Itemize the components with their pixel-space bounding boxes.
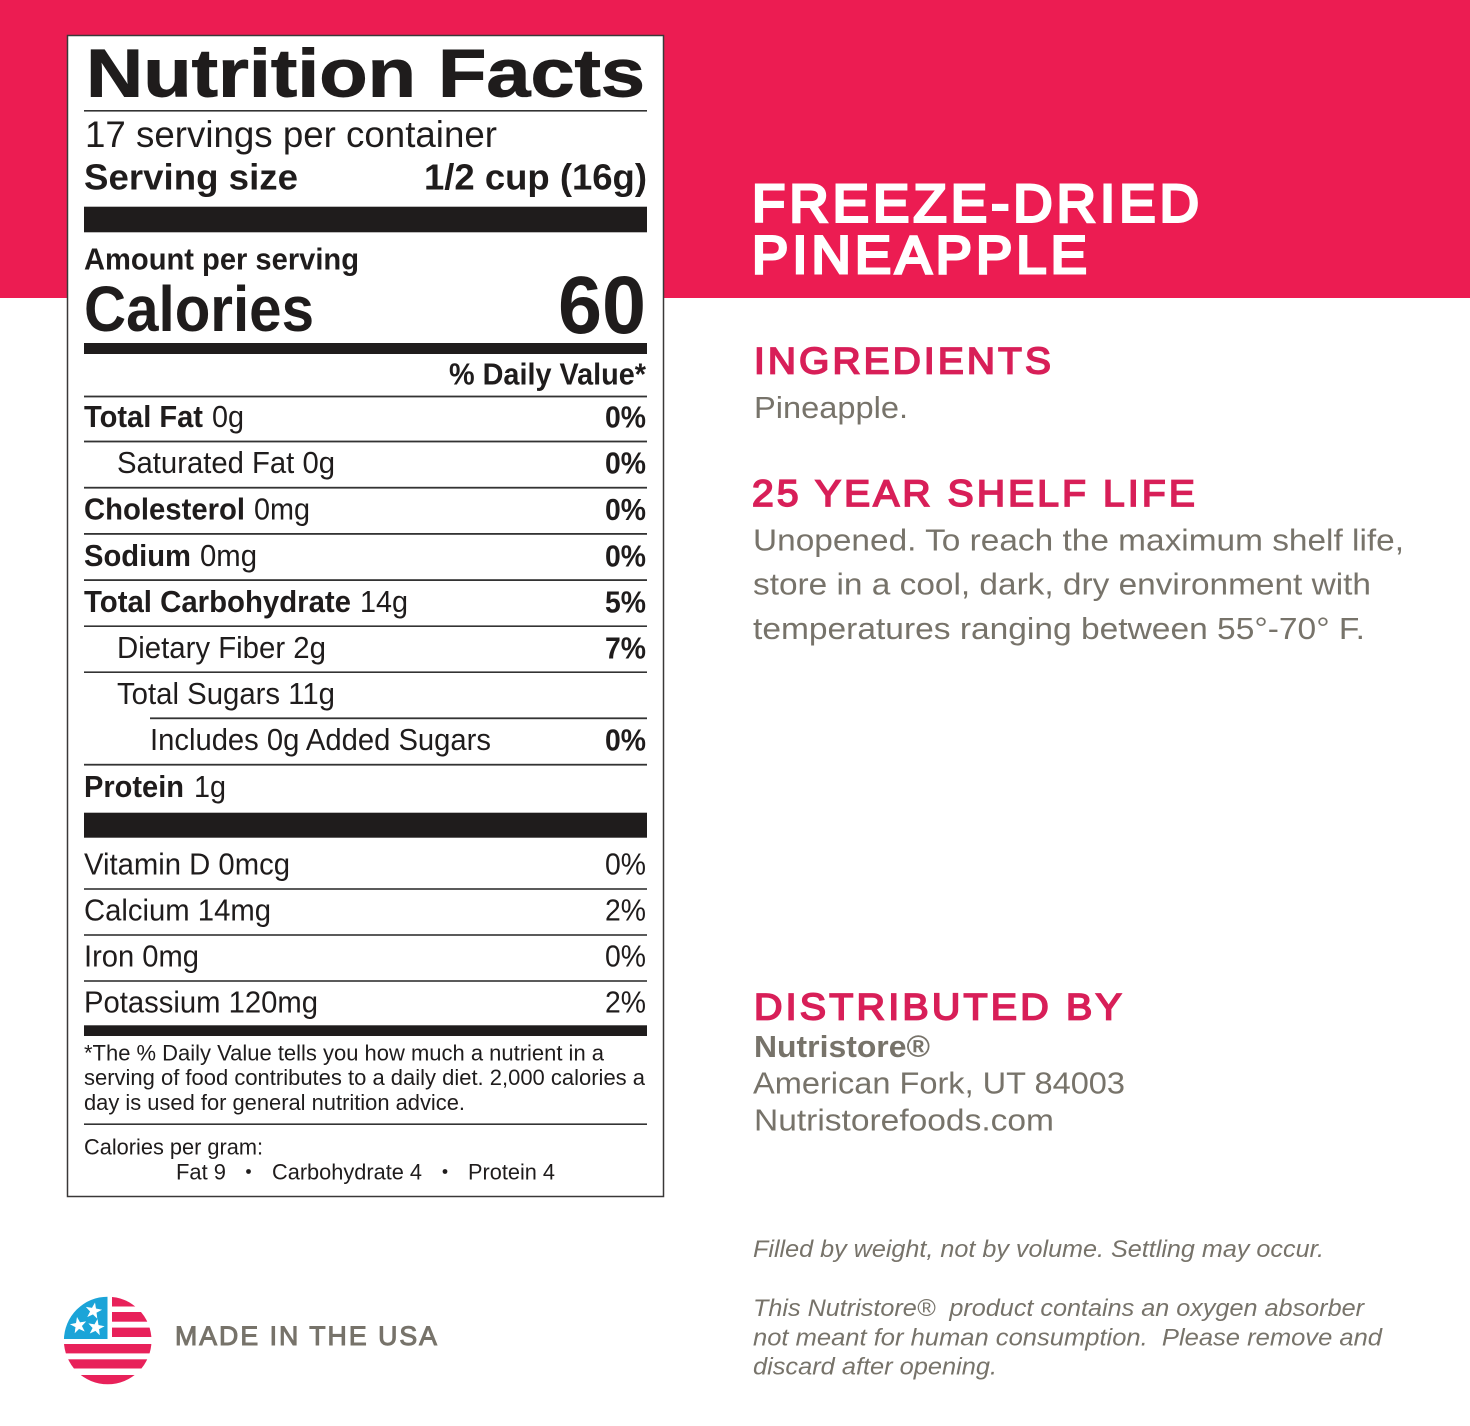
- amount per serving: Amount per serving: [84, 242, 359, 276]
- calories per gram: Protein 4: [468, 1160, 555, 1184]
- row: calcium: [84, 894, 646, 928]
- row: saturated fat: 0%: [605, 446, 646, 480]
- note: oxygen absorber: not meant for human consumption. Please remove and: [753, 1324, 1383, 1352]
- daily value header: % Daily Value*: [449, 356, 647, 392]
- row: total fat: [84, 400, 646, 434]
- calories: [84, 260, 646, 351]
- row: calcium: Calcium 14mg: [84, 894, 271, 928]
- row: vitamin d: 0%: [605, 848, 646, 882]
- serving size: 1/2 cup (16g): [424, 156, 647, 198]
- row: cholesterol: 0mg: [254, 492, 310, 526]
- row: cholesterol: 0%: [605, 493, 646, 527]
- row: dietary fiber: [117, 631, 646, 666]
- calories per gram: Carbohydrate 4: [272, 1160, 422, 1184]
- section: shelf life: Unopened. To reach the maximum shelf life,: [753, 523, 1404, 558]
- note: oxygen absorber: discard after opening.: [753, 1354, 997, 1380]
- row: potassium: 2%: [605, 986, 646, 1020]
- calories per gram: [84, 1134, 555, 1184]
- calories per gram: Fat 9: [176, 1160, 226, 1184]
- footnote: serving of food contributes to a daily diet. 2,000 calories a: [84, 1065, 645, 1090]
- row: cholesterol: Cholesterol: [84, 492, 245, 526]
- row: cholesterol: [84, 492, 646, 527]
- row: sodium: 0%: [605, 540, 646, 574]
- section: ingredients: Pineapple.: [754, 390, 908, 425]
- heading: Nutrition Facts: Nutrition Facts: [86, 36, 645, 112]
- footnote: [84, 1040, 645, 1115]
- serving size: [84, 156, 647, 198]
- section: ingredients: INGREDIENTS: [754, 340, 1054, 381]
- row: added sugars: Includes 0g Added Sugars: [150, 723, 491, 757]
- row: saturated fat: Saturated Fat 0g: [117, 446, 335, 480]
- row: vitamin d: Vitamin D 0mcg: [84, 848, 290, 882]
- calories: 60: [558, 260, 646, 351]
- section: shelf life: 25 YEAR SHELF LIFE: [752, 473, 1198, 514]
- footnote: day is used for general nutrition advice.: [84, 1090, 465, 1115]
- note: oxygen absorber: [753, 1295, 1383, 1380]
- made in the usa label: MADE IN THE USA: [175, 1321, 439, 1351]
- row: total fat: 0g: [212, 400, 244, 434]
- row: vitamin d: [84, 848, 646, 882]
- icon: american flag circle: [64, 1296, 152, 1384]
- row: dietary fiber: Dietary Fiber 2g: [117, 631, 326, 665]
- section: distributed by: Nutristore®: [754, 1029, 930, 1064]
- section: distributed by: American Fork, UT 84003: [753, 1066, 1125, 1100]
- title: freeze-dried pineapple: PINEAPPLE: [752, 226, 1091, 285]
- section: distributed by: Nutristorefoods.com: [754, 1102, 1054, 1138]
- calories: Calories: [84, 273, 314, 345]
- section: distributed by: [753, 986, 1125, 1138]
- section: ingredients: [754, 340, 1054, 425]
- note: filled by weight: Filled by weight, not by volume. Settling may occur.: [753, 1236, 1324, 1263]
- section: shelf life: [752, 473, 1404, 646]
- row: iron: [84, 940, 646, 974]
- row: iron: 0%: [605, 940, 646, 974]
- row: total carbohydrate: 14g: [360, 585, 408, 619]
- panel: nutrition facts label: [68, 36, 664, 1196]
- note: oxygen absorber: This Nutristore® product contains an oxygen absorber: [753, 1295, 1365, 1322]
- serving size: Serving size: [84, 156, 298, 198]
- row: total carbohydrate: Total Carbohydrate: [84, 585, 351, 619]
- row: sodium: 0mg: [200, 539, 257, 573]
- row: total sugars: Total Sugars 11g: [117, 677, 335, 711]
- row: potassium: Potassium 120mg: [84, 986, 318, 1020]
- row: saturated fat: [117, 446, 646, 480]
- row: added sugars: 0%: [605, 724, 646, 758]
- row: sodium: Sodium: [84, 539, 191, 573]
- pink header band: [0, 0, 1470, 298]
- title: freeze-dried pineapple: [752, 175, 1203, 285]
- row: dietary fiber: 7%: [605, 632, 646, 666]
- row: calcium: 2%: [605, 894, 646, 928]
- row: total fat: 0%: [605, 400, 646, 434]
- row: sodium: [84, 539, 646, 574]
- section: shelf life: temperatures ranging between 55°-70° F.: [753, 611, 1365, 646]
- row: iron: Iron 0mg: [84, 940, 199, 974]
- row: total carbohydrate: 5%: [605, 586, 646, 620]
- title: freeze-dried pineapple: FREEZE-DRIED: [752, 175, 1203, 234]
- servings per container: 17 servings per container: [85, 114, 497, 155]
- row: total carbohydrate: [84, 585, 646, 620]
- row: protein: Protein: [84, 770, 184, 804]
- row: protein: 1g: [194, 770, 226, 804]
- row: total fat: Total Fat: [84, 400, 203, 434]
- calories per gram: Calories per gram:: [84, 1134, 263, 1160]
- row: potassium: [84, 986, 646, 1020]
- section: shelf life: store in a cool, dark, dry environment with: [753, 567, 1371, 602]
- section: distributed by: DISTRIBUTED BY: [754, 986, 1125, 1027]
- footnote: *The % Daily Value tells you how much a nutrient in a: [84, 1040, 604, 1066]
